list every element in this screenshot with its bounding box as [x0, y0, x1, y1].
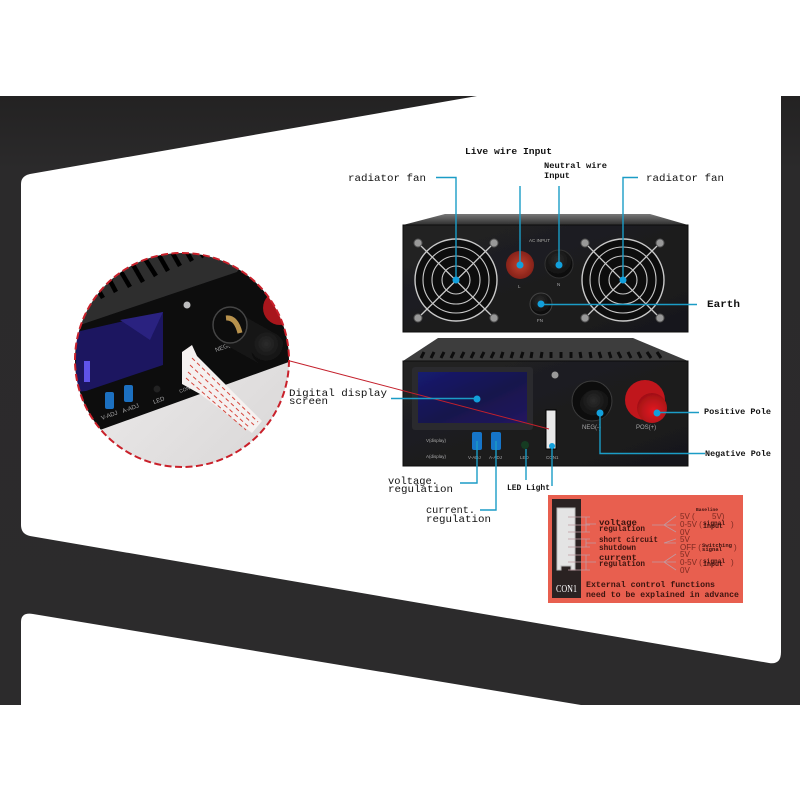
right fan	[581, 239, 664, 322]
function labels: voltage	[599, 518, 637, 528]
signal values: 5V)	[712, 512, 725, 521]
LED	[521, 441, 529, 449]
callout: LED light: LED Light	[507, 484, 550, 493]
rear panel	[403, 225, 688, 332]
earth terminal	[530, 293, 552, 315]
device body	[75, 269, 289, 430]
front small labels: CON1	[546, 455, 559, 460]
negative terminal	[572, 381, 612, 421]
callout: positive pole: Positive Pole	[704, 407, 771, 417]
callout: radiator fan right: radiator fan	[646, 173, 724, 185]
left fan	[414, 239, 498, 322]
signal annotations: signal	[703, 558, 725, 565]
rear view of power supply	[403, 214, 688, 332]
CON1 socket	[546, 410, 556, 449]
signal annotations: Switching	[702, 542, 732, 549]
front view of power supply	[403, 338, 688, 466]
callout: voltage regulation	[388, 441, 477, 496]
front small labels: A(display)	[426, 454, 447, 459]
callout: current regulation	[426, 441, 496, 526]
dashed circle border	[75, 253, 289, 467]
signal values: 5V	[680, 550, 690, 559]
callout: neutral wire input	[544, 162, 607, 268]
top surface with vents	[82, 253, 239, 324]
signal values	[680, 512, 737, 575]
zoom detail circle	[74, 252, 290, 468]
callout: radiator fan left: radiator fan	[348, 173, 426, 185]
zoomed screw	[184, 302, 190, 308]
signal values: )	[731, 558, 734, 567]
signal values: )	[734, 543, 737, 552]
positive terminal	[625, 380, 667, 423]
callout: live wire input: Live wire Input	[465, 146, 552, 157]
zoomed small labels	[101, 342, 235, 422]
front small labels: POS(+)	[636, 425, 656, 431]
callout: radiator fan right	[620, 173, 724, 284]
callout: current regulation: current.	[426, 505, 475, 517]
black terminal with gold ring	[213, 307, 285, 366]
callout: current regulation: regulation	[426, 514, 491, 526]
connection lines	[568, 516, 676, 570]
external control note: need to be explained in advance	[586, 590, 739, 600]
callout: earth	[538, 299, 740, 311]
red pointer line	[290, 361, 549, 429]
callout: voltage regulation: voltage.	[388, 476, 438, 488]
zoomed LED	[154, 386, 160, 392]
red terminal	[263, 297, 282, 325]
signal values: 5V (	[680, 512, 695, 521]
zoomed small labels: CON1	[179, 384, 194, 395]
external control note: External control functions	[586, 580, 715, 590]
zoomed small labels: V-ADJ	[101, 410, 119, 422]
function labels: shutdown	[599, 543, 636, 553]
floor	[101, 362, 289, 467]
signal annotations: input	[703, 561, 723, 568]
signal values: 0V	[680, 566, 690, 575]
front panel	[403, 361, 688, 466]
panel: external control	[548, 495, 743, 603]
callout: negative pole: Negative Pole	[705, 449, 771, 459]
signal annotations	[696, 507, 732, 568]
front vent slots	[421, 352, 661, 358]
adjust knobs	[472, 432, 501, 450]
rear top surface	[403, 214, 688, 225]
red background	[548, 495, 743, 603]
function labels: regulation	[599, 524, 645, 534]
display screen	[412, 367, 533, 430]
function labels	[599, 518, 658, 569]
signal values: 5V	[680, 535, 690, 544]
callout: LED light	[507, 443, 555, 493]
zoomed small labels: NEG(-)	[215, 342, 235, 354]
callout: neutral wire input: Input	[544, 172, 570, 181]
rear small labels: FN	[537, 318, 543, 323]
callout: voltage regulation: regulation	[388, 484, 453, 496]
callout: digital display screen: Digital display	[289, 388, 387, 400]
signal annotations: Baseline	[696, 507, 718, 513]
lower white panel	[21, 614, 581, 705]
callout: radiator fan left	[348, 173, 460, 284]
white connector	[557, 508, 575, 570]
zoomed small labels: A-ADJ	[122, 403, 140, 415]
front small labels: V-ADJ	[468, 455, 481, 460]
front small labels: A-ADJ	[489, 455, 502, 460]
front small labels: NEG(-)	[582, 425, 601, 431]
callout: digital display screen	[289, 388, 480, 408]
signal values: 0V	[680, 528, 690, 537]
zoomed display	[76, 312, 163, 392]
zoomed adjust buttons	[105, 385, 133, 409]
function labels: current	[599, 553, 637, 563]
callout: digital display screen: screen	[289, 397, 328, 408]
front small labels	[426, 425, 656, 460]
callout: negative pole	[596, 410, 771, 459]
connector strip	[552, 499, 581, 598]
neutral terminal	[545, 250, 573, 278]
zoomed small labels: LED	[153, 396, 166, 406]
callout: neutral wire input: Neutral wire	[544, 162, 607, 171]
main white panel	[21, 96, 781, 663]
signal annotations: input	[703, 523, 723, 530]
signal annotations: signal	[702, 546, 723, 553]
rear small labels: L	[518, 284, 521, 289]
signal values: )	[731, 520, 734, 529]
rear small labels: AC INPUT	[529, 238, 550, 243]
dark background band	[0, 96, 800, 705]
external control note	[586, 580, 739, 600]
signal values: 0-5V (	[680, 520, 702, 529]
screw	[552, 372, 558, 378]
signal values: 0-5V (	[680, 558, 702, 567]
front small labels: V(display)	[426, 438, 447, 443]
front small labels: LED	[520, 455, 530, 460]
function labels: regulation	[599, 559, 645, 569]
signal annotations: signal	[703, 520, 725, 527]
rear small labels: N	[557, 282, 560, 287]
callout: positive pole	[654, 407, 771, 417]
ribbon cable	[182, 345, 262, 433]
rear small labels	[518, 238, 560, 323]
display indicator bar	[84, 361, 90, 382]
signal values: OFF (	[680, 543, 701, 552]
front top surface	[403, 338, 688, 361]
CON1 label: CON1	[556, 583, 577, 595]
live terminal	[506, 251, 534, 279]
callout: earth: Earth	[707, 299, 740, 311]
function labels: short circuit	[599, 535, 658, 545]
callout: live wire input	[465, 146, 552, 268]
